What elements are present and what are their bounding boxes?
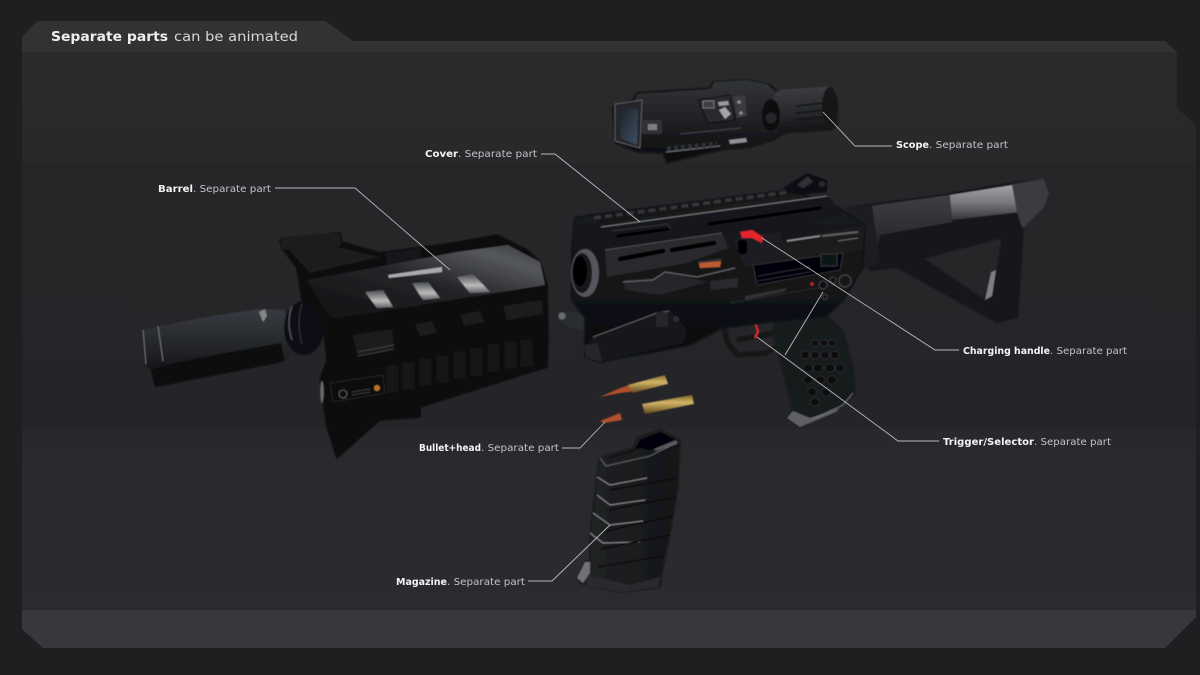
front lever	[558, 312, 594, 332]
barrel slots	[365, 274, 490, 308]
charging handle	[733, 230, 786, 268]
label: barrel	[158, 184, 271, 195]
barrel rear plate	[289, 246, 380, 273]
ejection window	[753, 253, 843, 285]
side panel	[605, 233, 728, 277]
barrel top block	[281, 233, 341, 250]
title: can be animated	[174, 30, 298, 45]
scope rail	[666, 128, 747, 152]
barrel housing	[280, 233, 548, 458]
label: trigger selector	[943, 437, 1111, 448]
label: scope: . Separate part	[929, 140, 1008, 151]
bottom strip	[22, 610, 1196, 648]
orange marker	[698, 258, 722, 268]
part: magazine	[577, 430, 680, 592]
label: bullet head: Bullet+head	[419, 443, 481, 454]
stock	[847, 180, 1048, 322]
rail and rear sight	[593, 173, 827, 224]
title: Separate parts	[51, 30, 168, 45]
label: magazine	[396, 577, 525, 588]
scope eyepiece tube	[762, 86, 839, 134]
label: cover: . Separate part	[458, 149, 537, 160]
barrel rail teeth	[387, 340, 532, 392]
part: scope	[613, 80, 839, 163]
barrel collar	[284, 301, 324, 355]
magazine opening	[600, 432, 678, 466]
rear upper panel	[780, 225, 865, 265]
label: trigger selector: Trigger/Selector	[943, 437, 1034, 448]
part: barrel	[142, 233, 548, 458]
label: scope	[896, 140, 1008, 151]
bullet head	[600, 413, 622, 423]
magazine foot	[577, 562, 660, 592]
grip texture	[801, 340, 845, 406]
label: magazine: Magazine	[396, 577, 447, 588]
label: charging handle: Charging handle	[963, 346, 1050, 357]
label: charging handle: . Separate part	[1050, 346, 1127, 357]
label: barrel: Barrel	[158, 184, 193, 195]
barrel muzzle tube	[142, 309, 290, 387]
selector buttons	[810, 275, 851, 300]
label: cover: Cover	[425, 149, 458, 160]
barrel mid band	[353, 300, 543, 355]
lower handguard	[584, 310, 687, 362]
label: magazine: . Separate part	[447, 577, 525, 588]
label: cover	[425, 149, 537, 160]
leader lines	[275, 112, 959, 581]
bullet 1	[600, 375, 668, 397]
magazine ribs	[590, 477, 647, 543]
cover	[600, 195, 843, 246]
label: bullet head	[419, 443, 559, 454]
bullets	[600, 375, 694, 423]
barrel label plate	[320, 375, 385, 403]
label: charging handle	[963, 346, 1127, 357]
label: barrel: . Separate part	[193, 184, 271, 195]
part: receiver and stock	[558, 173, 1048, 427]
bullet 2	[642, 395, 694, 414]
barrel glossy face	[307, 245, 545, 318]
barrel light strip	[388, 267, 442, 278]
label: scope: Scope	[896, 140, 929, 151]
label: trigger selector: . Separate part	[1034, 437, 1111, 448]
contour line and lower details	[623, 268, 845, 303]
scope control panel	[698, 95, 747, 123]
muzzle ring	[571, 249, 599, 297]
trigger	[755, 323, 758, 338]
title	[51, 30, 298, 45]
trigger guard	[724, 327, 785, 355]
receiver body	[572, 190, 865, 362]
label: bullet head: . Separate part	[481, 443, 559, 454]
grip	[773, 310, 855, 427]
title tab	[22, 21, 1177, 52]
scope lens	[615, 100, 662, 148]
